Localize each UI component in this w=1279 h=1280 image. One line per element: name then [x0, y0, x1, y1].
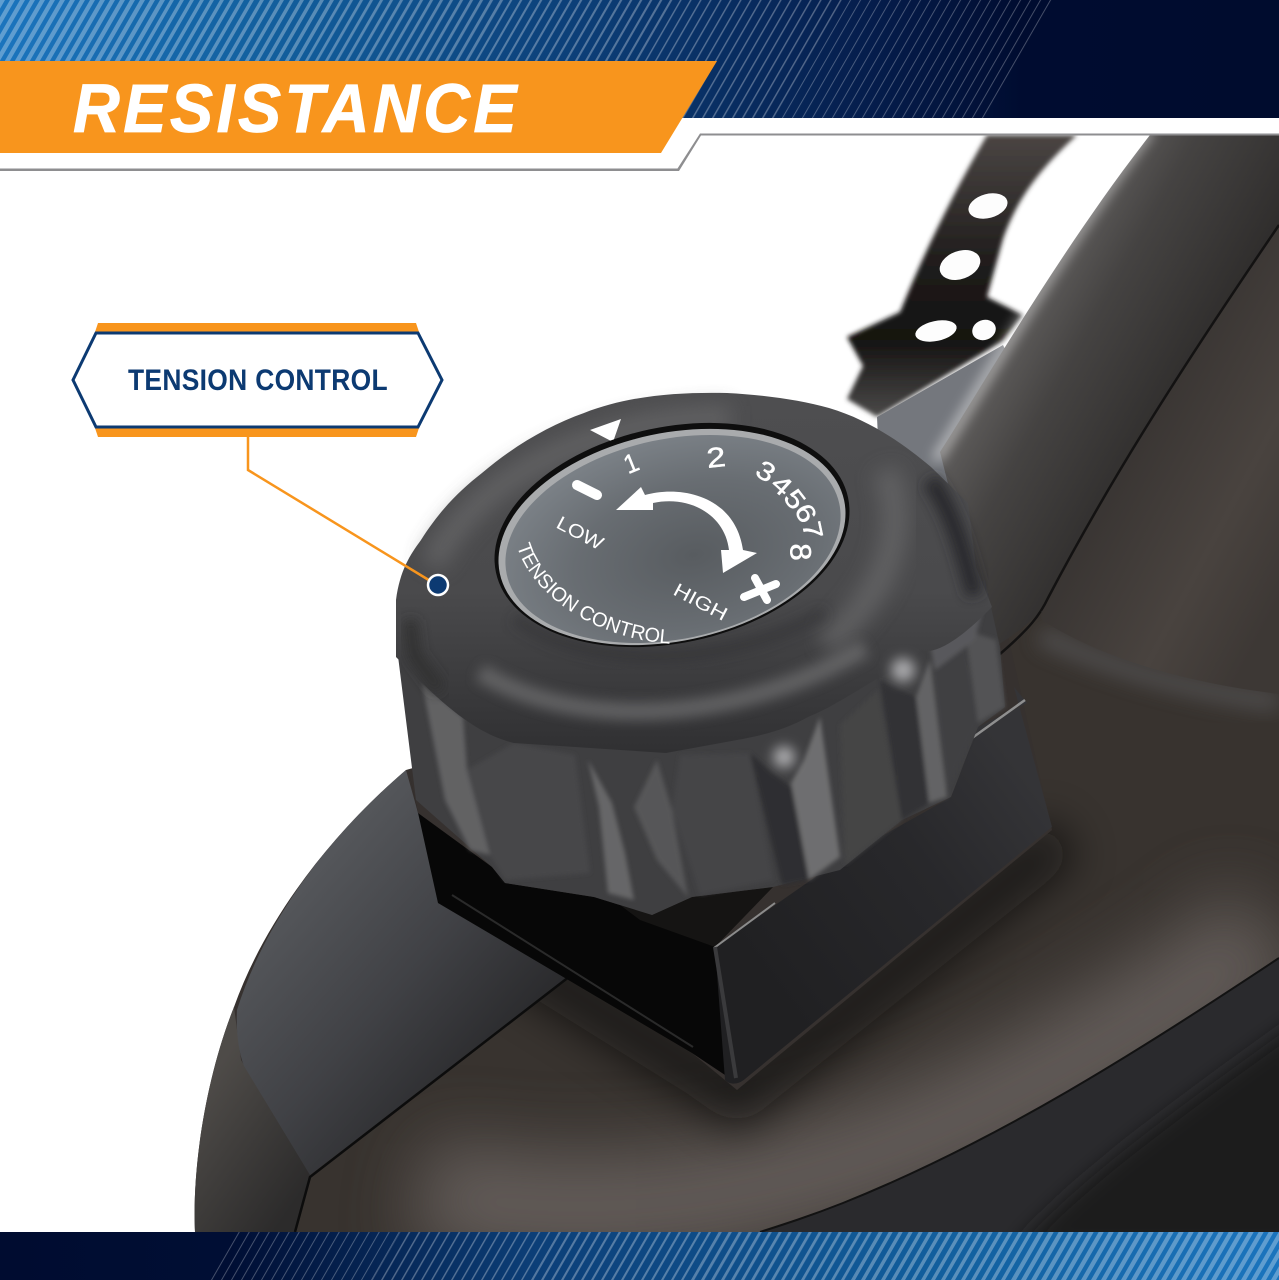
- glossy highlights: [773, 658, 915, 768]
- footer stripes: [208, 1232, 1279, 1280]
- column left part: [940, 135, 1279, 650]
- LOW label: LOW: [553, 513, 607, 555]
- column seam: [1000, 225, 1279, 654]
- seam lines on plate: [295, 958, 1279, 1232]
- pointer triangle: [590, 419, 621, 442]
- dial numbers: [624, 447, 824, 560]
- callout bottom bar: [95, 428, 419, 437]
- dial numbers: 4: [765, 469, 797, 502]
- plate top left surface: [237, 770, 574, 1175]
- dial numbers: 2: [705, 441, 727, 474]
- plus symbol: [744, 578, 776, 600]
- footer band: [0, 1232, 1279, 1280]
- header band: [0, 0, 1279, 118]
- dial numbers: 6: [788, 499, 822, 528]
- callout: tension control: [73, 323, 448, 595]
- dial numbers: 3: [750, 455, 780, 489]
- minus symbol: [577, 485, 597, 495]
- light ridge behind knob: [877, 345, 1004, 484]
- base plate silhouette: [194, 638, 1052, 1232]
- dial numbers: 7: [796, 519, 828, 542]
- knob skirt: [396, 580, 1005, 915]
- title banner: [0, 61, 717, 153]
- plate left side face: [195, 1007, 310, 1232]
- title: RESISTANCE: [73, 70, 519, 147]
- strap with holes: [847, 135, 1077, 417]
- knob skirt flutes: [422, 587, 1005, 900]
- dome shading: [410, 418, 975, 711]
- dial face: [506, 435, 840, 644]
- dial numbers: 5: [777, 484, 811, 515]
- divider line: [0, 134, 1279, 171]
- knob top dome: [396, 393, 992, 753]
- column right part: [1041, 225, 1279, 694]
- plate dark lower right: [760, 958, 1279, 1232]
- direction arrow: [616, 487, 757, 573]
- TENSION CONTROL dial label: TENSION CONTROL: [518, 542, 670, 644]
- product photo: tension control knob on bike: [194, 125, 1279, 1232]
- callout dot: [428, 575, 448, 595]
- dial ring: [494, 422, 850, 648]
- plate darkest corner: [1030, 1033, 1279, 1232]
- base block: [407, 687, 1052, 1084]
- dial bezel: [498, 428, 846, 646]
- callout hexagon: [73, 333, 442, 427]
- callout label: TENSION CONTROL: [128, 362, 388, 396]
- HIGH label: HIGH: [670, 580, 731, 626]
- leader line: [248, 437, 432, 582]
- column soft left edge: [936, 130, 1150, 460]
- callout top bar: [95, 323, 419, 332]
- header stripes: [0, 0, 1056, 118]
- plate warm surface: [384, 626, 1279, 1232]
- dial numbers: 8: [783, 543, 816, 561]
- dial numbers: 1: [620, 448, 643, 480]
